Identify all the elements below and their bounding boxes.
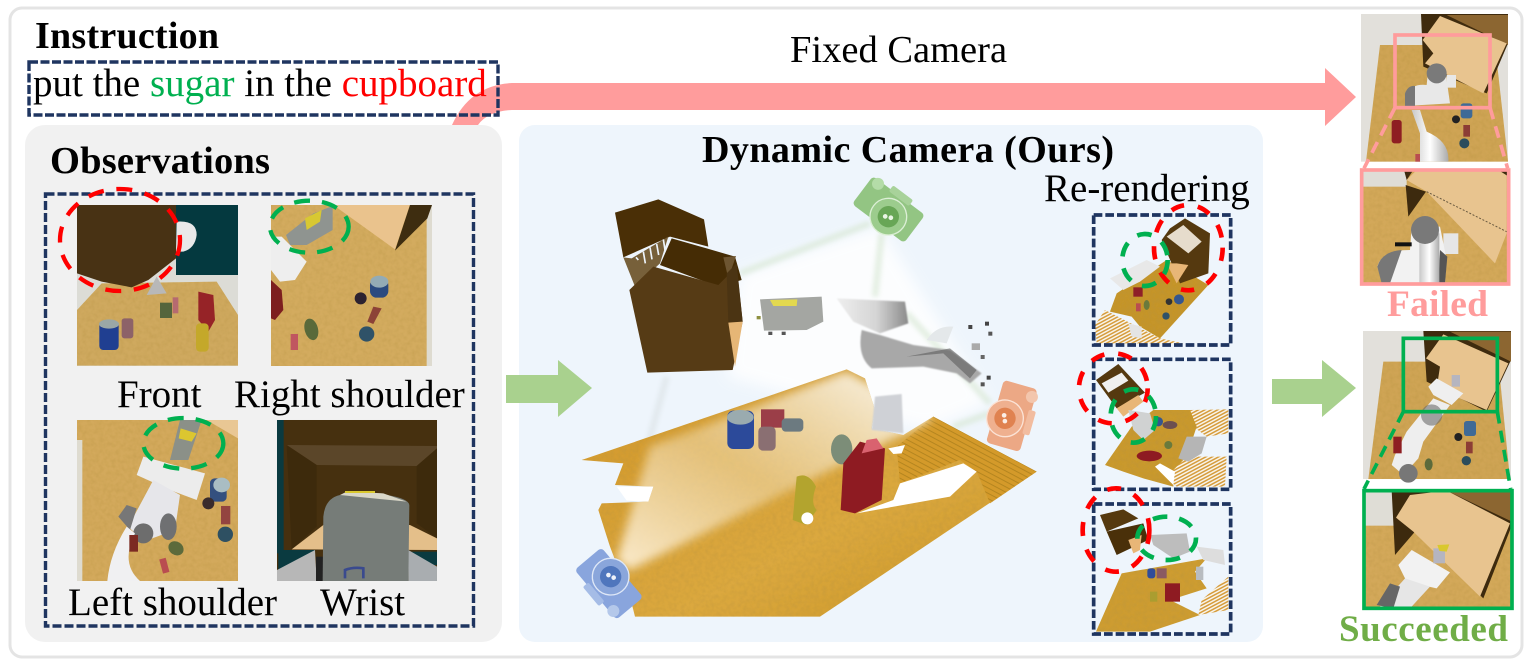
point cloud: sugar box (757, 297, 823, 335)
instruction box: put the sugar in the cupboard (33, 62, 487, 105)
label: right shoulder: Right shoulder (234, 373, 465, 416)
image: front view (77, 205, 238, 366)
zoom box (1395, 35, 1490, 108)
point cloud: table (582, 369, 1037, 617)
observations heading: Observations (50, 140, 270, 182)
image: right shoulder view (271, 205, 432, 366)
camera icon: orange (980, 378, 1042, 453)
instruction heading: Instruction (35, 15, 219, 57)
highlight: green circle on sugar, right shoulder view (270, 201, 349, 253)
observation views frame (46, 194, 474, 626)
label: wrist: Wrist (320, 581, 405, 624)
image: succeeded close-up (1364, 491, 1512, 608)
table holes (617, 445, 977, 513)
re-rendering 2 (1094, 359, 1231, 489)
fixed camera arrow (452, 68, 1356, 126)
close-up frame (1364, 491, 1512, 608)
panel: failed result (1361, 14, 1509, 284)
image: left shoulder view (77, 420, 238, 581)
close-up frame (1362, 170, 1509, 284)
arrow: re-rendering to result (1272, 360, 1356, 417)
camera icon: blue (571, 543, 648, 623)
image: failed close-up (1362, 170, 1509, 284)
zoom guide lines (1364, 108, 1508, 168)
observation scenes (60, 189, 437, 581)
point cloud: cupboard (615, 199, 743, 373)
panel: dynamic camera (519, 125, 1263, 642)
panel: succeeded result (1363, 331, 1512, 608)
light beam on table (617, 372, 933, 570)
camera icon: green (848, 172, 928, 248)
zoom guide lines (1364, 412, 1511, 489)
image: wrist view (277, 420, 437, 581)
failed label: Failed (1387, 284, 1488, 325)
table stripes (897, 417, 1037, 503)
image: fixed camera top view (1361, 14, 1508, 162)
highlight: red circle on cupboard, front view (60, 189, 180, 291)
fixed camera label: Fixed Camera (790, 29, 1007, 71)
point cloud: robot arm (837, 298, 992, 433)
succeeded label: Succeeded (1339, 609, 1508, 650)
point cloud: objects on table (727, 409, 885, 525)
label: front: Front (117, 373, 202, 416)
image: dynamic camera top view (1363, 331, 1511, 483)
highlights on re-rendered views (1079, 205, 1223, 572)
dynamic camera heading: Dynamic Camera (Ours) (702, 129, 1114, 171)
label: left shoulder: Left shoulder (68, 581, 277, 624)
re-rendering 1 (1094, 215, 1231, 345)
zoom box (1403, 338, 1497, 412)
re-rendering label: Re-rendering (1044, 167, 1250, 210)
re-rendering 3 (1094, 504, 1231, 634)
highlight: green circle on sugar, left shoulder view (143, 418, 223, 469)
panel: observations (25, 125, 502, 642)
re-rendered views (1079, 205, 1231, 634)
camera frustum glow (617, 223, 990, 560)
arrow: observations to dynamic camera (506, 360, 592, 417)
3D scene (571, 172, 1042, 623)
